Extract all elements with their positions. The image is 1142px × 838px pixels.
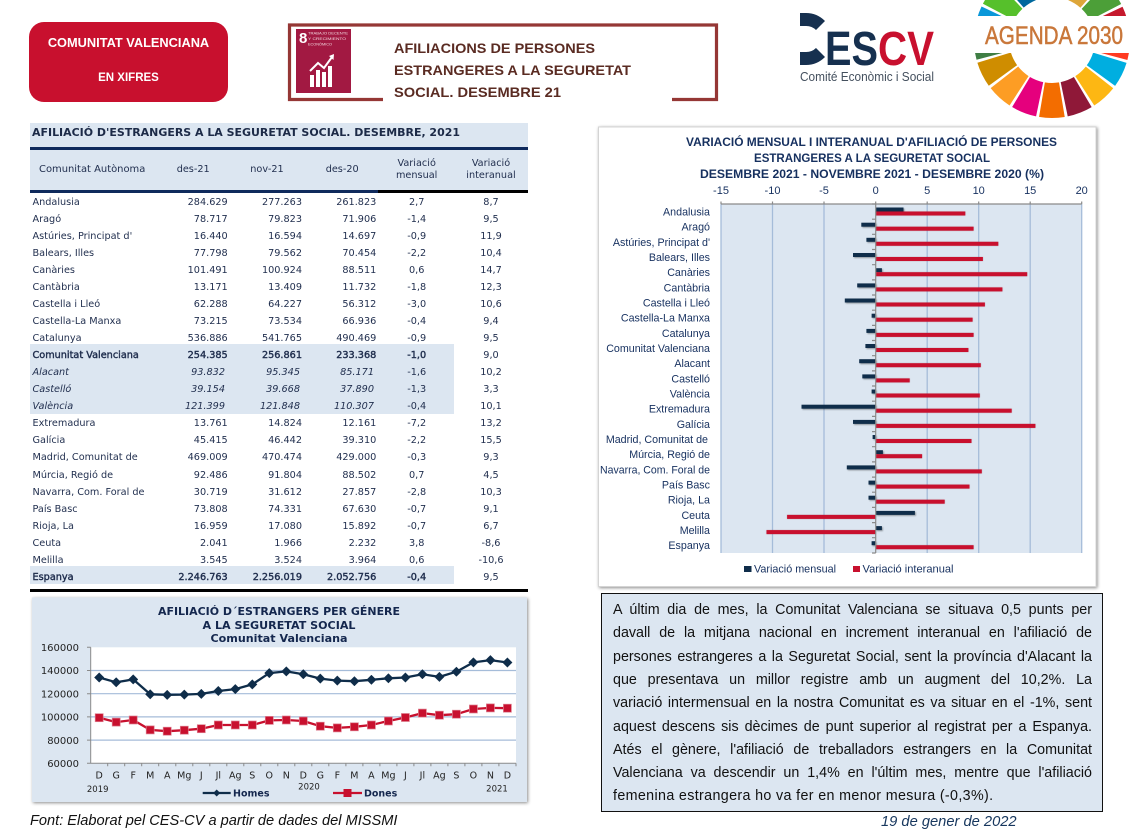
title text: AFILIACIONS DE PERSONES — [394, 40, 595, 56]
rows: -8,6 — [482, 538, 500, 549]
chart title — [686, 134, 1057, 181]
rows: 39.154 — [191, 384, 225, 395]
category labels: Alacant — [674, 358, 710, 370]
rows: -10,6 — [478, 555, 504, 566]
rows: Cantàbria — [32, 282, 80, 293]
rows: Aragó — [32, 214, 61, 225]
x axis labels: 20 — [1076, 185, 1088, 197]
chart title: ESTRANGERES A LA SEGURETAT SOCIAL — [754, 151, 990, 165]
x axis labels: Jl — [215, 770, 221, 782]
x axis labels: S — [453, 770, 459, 782]
category labels: Comunitat Valenciana — [606, 343, 710, 355]
category labels: Castella-La Manxa — [621, 313, 710, 325]
rows: 73.215 — [194, 316, 228, 327]
category labels: Navarra, Com. Foral de — [600, 464, 710, 476]
rows: 284.629 — [188, 197, 228, 208]
category labels: Madrid, Comunitat de — [606, 434, 708, 446]
chart title: VARIACIÓ MENSUAL I INTERANUAL D'AFILIACIÓ DE PERSONES — [686, 134, 1057, 149]
rows: 92.486 — [194, 470, 228, 480]
rows: 79.823 — [268, 214, 302, 225]
rows: 10,1 — [480, 401, 502, 412]
rows: 110.307 — [334, 401, 374, 412]
rows: 14,7 — [480, 265, 502, 276]
rows: Balears, Illes — [32, 248, 94, 259]
rows: 74.331 — [268, 504, 302, 515]
table header: des-20 — [326, 164, 359, 175]
rows: 9,5 — [483, 214, 499, 225]
rows: -0,7 — [407, 521, 426, 532]
y axis labels: 160000 — [41, 643, 79, 654]
rows: 10,3 — [480, 487, 502, 498]
category labels: Rioja, La — [668, 495, 710, 507]
x axis labels: J — [199, 770, 203, 782]
y axis labels: 60000 — [47, 759, 79, 770]
rows: 30.719 — [194, 487, 228, 498]
table title band: AFILIACIÓ D'ESTRANGERS A LA SEGURETAT SOCIAL. DESEMBRE, 2021 — [32, 126, 460, 139]
rows: 62.288 — [194, 299, 228, 310]
table header: interanual — [466, 170, 516, 181]
rows: 470.474 — [262, 452, 302, 463]
series: Homes — [99, 660, 507, 695]
rows: 10,2 — [480, 367, 502, 378]
text block: analysis: davall de la mitjana nacional en increment interanual en l'afiliació de — [613, 625, 1092, 641]
rows: 88.502 — [342, 470, 376, 480]
rows: -0,3 — [407, 452, 426, 463]
chart panel — [598, 127, 1096, 586]
rows: 536.886 — [188, 333, 228, 344]
rows: 0,7 — [409, 470, 424, 480]
rows: 101.491 — [188, 265, 228, 276]
bar chart: variació mensual i interanual — [596, 125, 1100, 590]
source note: Font: Elaborat pel CES-CV a partir de dades del MISSMI — [30, 813, 397, 829]
category labels: Cantàbria — [664, 282, 710, 294]
rows: Castelló — [32, 384, 71, 395]
rows: 3,8 — [409, 538, 424, 549]
rows: 70.454 — [342, 248, 376, 259]
rows: 78.717 — [194, 214, 228, 225]
rows: -1,4 — [407, 214, 426, 225]
rows: Andalusia — [32, 197, 80, 208]
rows: 37.890 — [340, 384, 374, 395]
table header: des-21 — [177, 164, 210, 175]
rows: 9,4 — [483, 316, 499, 327]
x axis labels: Jl — [419, 770, 425, 782]
rows: Ceuta — [32, 538, 61, 549]
rows: Castella i Lleó — [32, 299, 100, 310]
rows — [32, 197, 504, 583]
rows: 100.924 — [262, 265, 302, 276]
rows: -0,7 — [407, 504, 426, 515]
rows: -2,8 — [407, 487, 426, 498]
year labels: 2021 — [486, 784, 508, 794]
rows: 10,6 — [480, 299, 502, 310]
table header: nov-21 — [250, 164, 284, 175]
rows: 8,7 — [483, 197, 499, 208]
y axis labels: 140000 — [41, 666, 79, 677]
rows: 541.765 — [262, 333, 302, 344]
chart title: Comunitat Valenciana — [210, 633, 348, 645]
x axis labels: N — [487, 770, 494, 782]
rows: 77.798 — [194, 248, 228, 259]
rows: 10,4 — [480, 248, 502, 259]
text block: analysis: Valenciana va descendir un 1,4% en l'últim mes, mentre que l'afiliació — [613, 765, 1092, 781]
rows: 2.052.756 — [327, 572, 376, 583]
legend: Dones — [364, 788, 398, 800]
rows: 9,5 — [483, 333, 499, 344]
title text: ESTRANGERES A LA SEGURETAT — [394, 62, 631, 78]
button: Comunitat Valenciana en xifres — [29, 22, 228, 102]
rows: Extremadura — [32, 418, 95, 429]
rows: Canàries — [32, 265, 75, 276]
x axis labels: 15 — [1024, 185, 1036, 197]
button: Comunitat Valenciana en xifres: COMUNITAT VALENCIANA — [48, 34, 209, 50]
rows: 39.310 — [342, 435, 376, 446]
rows: 3.964 — [349, 555, 376, 566]
logo: CES-CV — [800, 13, 934, 84]
x axis labels: M — [146, 770, 154, 782]
text block: analysis: aquest descens sis dècimes de punt superior al registrat per a Espanya. — [613, 718, 1092, 734]
x axis labels: Mg — [177, 770, 191, 782]
chart title: A LA SEGURETAT SOCIAL — [202, 620, 356, 632]
x axis labels: G — [113, 770, 120, 782]
text block: analysis — [601, 593, 1103, 812]
rows: 12.161 — [342, 418, 376, 429]
y axis labels: 100000 — [41, 713, 79, 724]
legend — [744, 564, 954, 576]
rows: Múrcia, Regió de — [32, 470, 113, 480]
year labels: 2020 — [298, 782, 320, 792]
header: title frame with SDG 8 tile — [288, 23, 718, 102]
rows: 1.966 — [274, 538, 302, 549]
x axis labels: G — [317, 770, 324, 782]
rows: País Basc — [32, 504, 78, 515]
year labels: 2019 — [87, 785, 109, 795]
rows: 9,3 — [483, 452, 499, 463]
rows: -7,2 — [407, 418, 426, 429]
rows: 15,5 — [480, 435, 502, 446]
rows: 66.936 — [342, 316, 376, 327]
icon: SDG 8 tile: ECONÓMICO — [308, 42, 332, 46]
title text — [394, 40, 631, 100]
x axis labels: Mg — [381, 770, 396, 782]
logo: CES-CV: ES — [825, 23, 878, 76]
text block: analysis: femenina estrangera ho va fer en menor mesura (-0,3%). — [613, 788, 993, 804]
icon: SDG 8 tile — [296, 29, 351, 93]
text block: analysis: A últim dia de mes, la Comunitat Valenciana se situava 0,5 punts per — [613, 602, 1092, 618]
series: variació mensual — [802, 208, 915, 545]
rows: -1,0 — [407, 350, 426, 361]
rows: 15.892 — [342, 521, 376, 532]
icon: SDG 8 tile: Y CRECIMIENTO — [308, 36, 346, 41]
rows: 3.524 — [274, 555, 302, 566]
chart title: AFILIACIÓ D´ESTRANGERS PER GÉNERE — [158, 605, 400, 618]
rows: 2.041 — [200, 538, 228, 549]
rows: -2,2 — [407, 435, 426, 446]
series: Dones — [99, 708, 507, 731]
x axis labels: N — [283, 770, 290, 782]
rows: 6,7 — [483, 521, 499, 532]
x axis labels: D — [504, 770, 511, 782]
category labels — [600, 206, 711, 552]
rows: Astúries, Principat d' — [32, 231, 132, 242]
rows: 2.246.763 — [178, 572, 228, 583]
category labels: Astúries, Principat d' — [613, 237, 710, 249]
table title band — [30, 123, 528, 148]
rows: 277.263 — [262, 197, 302, 208]
rows: -1,3 — [407, 384, 426, 395]
rows: -2,2 — [407, 248, 426, 259]
rows: -0,4 — [407, 401, 426, 412]
plot area — [87, 647, 516, 766]
rows: 11,9 — [480, 231, 502, 242]
x axis labels: -15 — [713, 185, 729, 197]
rows: Madrid, Comunitat de — [32, 452, 138, 463]
text block: analysis: persones estrangeres a la Seguretat Social, sent la província d'Alacant la — [613, 649, 1092, 665]
x axis labels: F — [335, 770, 340, 782]
x axis labels: Ag — [229, 770, 242, 782]
frame — [290, 25, 716, 100]
rows: Catalunya — [32, 333, 82, 344]
rows: 429.000 — [336, 452, 376, 463]
x axis labels: M — [350, 770, 359, 782]
rows: 85.171 — [340, 367, 374, 378]
rows: 27.857 — [342, 487, 376, 498]
rows: 16.440 — [194, 231, 228, 242]
x axis labels: O — [266, 770, 273, 782]
year labels — [87, 782, 508, 795]
table header: Comunitat Autònoma — [39, 164, 145, 175]
rows: Comunitat Valenciana — [32, 350, 139, 361]
date: 19 de gener de 2022 — [881, 814, 1017, 830]
rows: 4,5 — [483, 470, 499, 480]
legend — [203, 788, 398, 800]
category labels: Castelló — [671, 373, 710, 385]
x axis labels: 0 — [873, 185, 879, 197]
chart panel — [32, 598, 527, 802]
rows: -0,4 — [407, 572, 426, 583]
x axis labels — [96, 770, 511, 782]
category labels: Extremadura — [649, 404, 710, 416]
x axis labels: 5 — [924, 185, 930, 197]
y axis labels: 80000 — [47, 736, 79, 747]
x axis labels: O — [470, 770, 477, 782]
table header — [30, 147, 528, 193]
rows: 71.906 — [342, 214, 376, 225]
rows: 490.469 — [336, 333, 376, 344]
rows: 11.732 — [342, 282, 376, 293]
icon: SDG 8 tile: 8 — [299, 30, 307, 47]
rows: 2.256.019 — [253, 572, 302, 583]
rows: 13.761 — [194, 418, 228, 429]
rows: 46.442 — [268, 435, 302, 446]
x axis labels: F — [130, 770, 136, 782]
x axis labels: A — [368, 770, 375, 782]
rows: Espanya — [32, 572, 74, 583]
rows: -0,9 — [407, 333, 426, 344]
rows: 14.824 — [268, 418, 302, 429]
rows: 16.594 — [268, 231, 302, 242]
category labels: Canàries — [667, 267, 710, 279]
rows: València — [32, 401, 73, 412]
rows: -0,9 — [407, 231, 426, 242]
rows: 13.409 — [268, 282, 302, 293]
rows: -0,4 — [407, 316, 426, 327]
text block: analysis: variació intermensual en la nostra Comunitat es va situar en el -1%, sent — [613, 695, 1092, 711]
rows: Navarra, Com. Foral de — [32, 487, 144, 498]
rows: Alacant — [32, 367, 69, 378]
category labels: Melilla — [680, 525, 710, 537]
x axis labels: D — [300, 770, 307, 782]
rows: Galícia — [32, 435, 65, 446]
category labels: Catalunya — [662, 328, 710, 340]
rows: 14.697 — [342, 231, 376, 242]
x axis labels: -10 — [765, 185, 780, 197]
line chart: afiliació per gènere — [30, 596, 530, 806]
x axis labels: 10 — [973, 185, 985, 197]
series: variació interanual — [766, 212, 1035, 549]
category labels: Castella i Lleó — [643, 298, 710, 310]
category labels: Múrcia, Regió de — [629, 449, 710, 461]
category labels: País Basc — [662, 480, 711, 492]
x axis labels — [713, 185, 1088, 197]
rows: 79.562 — [268, 248, 302, 259]
rows: 73.534 — [268, 316, 302, 327]
rows: 254.385 — [188, 350, 228, 361]
chart title — [158, 605, 400, 645]
x axis labels: S — [249, 770, 255, 782]
zero axis — [872, 204, 876, 553]
table bottom rule — [30, 589, 528, 592]
rows: 9,0 — [483, 350, 499, 361]
text block: analysis: que presentava un millor registre amb un augment del 10,2%. La — [613, 672, 1092, 688]
highlight band: Comunitat Valenciana — [30, 344, 454, 414]
logo: CES-CV: Comité Econòmic i Social — [800, 70, 934, 84]
rows: -1,6 — [407, 367, 426, 378]
x axis labels: -5 — [819, 185, 829, 197]
rows: 256.861 — [262, 350, 302, 361]
rows: 261.823 — [336, 197, 376, 208]
legend: Variació interanual — [862, 564, 954, 576]
rows: 17.080 — [268, 521, 302, 532]
rows: 67.630 — [342, 504, 376, 515]
rows: 121.848 — [260, 401, 300, 412]
rows: -1,8 — [407, 282, 426, 293]
rows: 12,3 — [480, 282, 502, 293]
rows: 91.804 — [268, 470, 302, 480]
legend: Variació mensual — [754, 564, 836, 576]
highlight band: Espanya — [30, 566, 454, 584]
rows: Rioja, La — [32, 521, 74, 532]
table header: Variació — [472, 158, 510, 169]
rows: 64.227 — [268, 299, 302, 310]
category labels: Aragó — [681, 222, 710, 234]
table: afiliació d'estrangers — [30, 123, 528, 592]
rows: 2,7 — [409, 197, 424, 208]
icon: SDG 8 tile: TRABAJO DECENTE — [308, 30, 348, 36]
button: Comunitat Valenciana en xifres: EN XIFRES — [98, 72, 159, 84]
rows: 469.009 — [188, 452, 228, 463]
rows: 73.808 — [194, 504, 228, 515]
y axis labels: 120000 — [41, 689, 79, 700]
rows: 2.232 — [349, 538, 376, 549]
table header: mensual — [396, 170, 437, 181]
rows: 121.399 — [185, 401, 225, 412]
x axis labels: J — [403, 770, 407, 782]
rows: 95.345 — [266, 367, 300, 378]
category labels: Ceuta — [681, 510, 710, 522]
table header: Variació — [398, 158, 436, 169]
rows: 45.415 — [194, 435, 228, 446]
rows: 88.511 — [342, 265, 376, 276]
rows: 9,5 — [483, 572, 499, 583]
rows: 13.171 — [194, 282, 228, 293]
x axis labels: Ag — [433, 770, 446, 782]
rows: 9,1 — [483, 504, 499, 515]
logo: Agenda 2030 wheel — [975, 0, 1129, 118]
category labels: Balears, Illes — [649, 252, 710, 264]
legend: Homes — [233, 788, 270, 800]
rows: 39.668 — [266, 384, 300, 395]
category labels: Galícia — [677, 419, 710, 431]
rows: 16.959 — [194, 521, 228, 532]
category labels: València — [670, 388, 710, 400]
rows: 3.545 — [200, 555, 228, 566]
rows: Melilla — [32, 555, 64, 566]
rows: 3,3 — [483, 384, 499, 395]
rows: 93.832 — [191, 367, 225, 378]
x axis labels: D — [96, 770, 103, 782]
rows: 0,6 — [409, 555, 424, 566]
category labels: Andalusia — [663, 206, 710, 218]
chart title: DESEMBRE 2021 - NOVEMBRE 2021 - DESEMBRE 2020 (%) — [700, 167, 1044, 181]
y axis labels — [41, 643, 79, 770]
rows: Castella-La Manxa — [32, 316, 121, 327]
rows: -3,0 — [407, 299, 426, 310]
rows: 13,2 — [480, 418, 502, 429]
rows: 56.312 — [342, 299, 376, 310]
plot area — [721, 202, 1082, 553]
title text: SOCIAL. DESEMBRE 21 — [394, 84, 561, 100]
rows: 31.612 — [268, 487, 302, 498]
category labels: Espanya — [668, 540, 710, 552]
text block: analysis: Atés el gènere, l'afiliació de treballadors estrangers en la Comunitat — [613, 742, 1092, 758]
x axis labels: A — [164, 770, 171, 782]
rows: 0,6 — [409, 265, 424, 276]
rows: 233.368 — [336, 350, 376, 361]
